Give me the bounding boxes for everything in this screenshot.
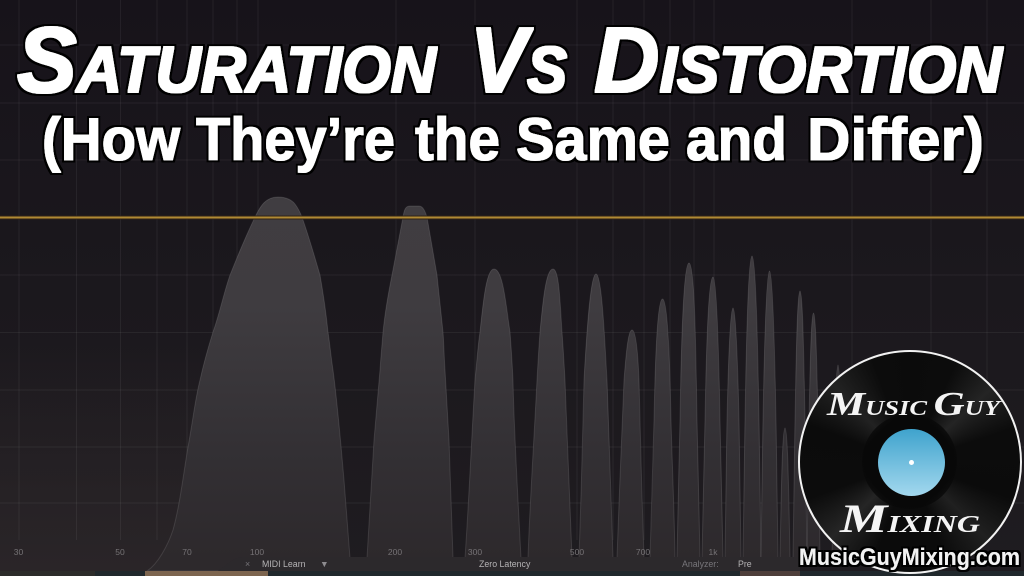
logo script: Mixing: M IXING <box>839 496 981 541</box>
harmonic peaks chart <box>147 197 844 571</box>
plugin toolbar: Analyzer: <box>682 559 719 569</box>
threshold line <box>0 216 1024 220</box>
frequency axis labels: 70 <box>182 547 192 557</box>
logo script: Music Guy: M USIC G UY <box>826 386 1003 423</box>
plugin toolbar <box>218 557 800 571</box>
subtitle: and <box>686 106 787 173</box>
title: DISTORTION <box>594 8 1004 112</box>
subtitle: (How <box>42 106 180 173</box>
plugin toolbar: Pre <box>738 559 752 569</box>
frequency axis labels: 200 <box>388 547 402 557</box>
frequency axis labels: 500 <box>570 547 584 557</box>
frequency axis labels <box>14 547 718 557</box>
frequency axis labels: 300 <box>468 547 482 557</box>
plugin toolbar: × <box>245 559 250 569</box>
title: SATURATION <box>17 8 438 112</box>
plugin toolbar: Zero Latency <box>479 559 531 569</box>
record label <box>878 428 944 496</box>
subtitle: They’re <box>196 106 395 173</box>
plugin toolbar: ▼ <box>320 559 329 569</box>
vinyl record logo <box>798 350 1022 574</box>
subtitle: Same <box>516 106 670 173</box>
subtitle: the <box>415 106 500 173</box>
frequency axis labels: 50 <box>115 547 125 557</box>
plugin toolbar: MIDI Learn <box>262 559 306 569</box>
subtitle: Differ) <box>807 106 984 173</box>
frequency axis labels: 700 <box>636 547 650 557</box>
frequency axis labels: 100 <box>250 547 264 557</box>
title: VS <box>470 8 567 112</box>
bottom photo strip <box>0 571 1024 576</box>
title <box>17 8 1004 112</box>
spindle hole <box>908 460 914 464</box>
frequency axis labels: 30 <box>14 547 23 557</box>
subtitle <box>42 106 984 173</box>
frequency axis labels: 1k <box>709 547 718 557</box>
